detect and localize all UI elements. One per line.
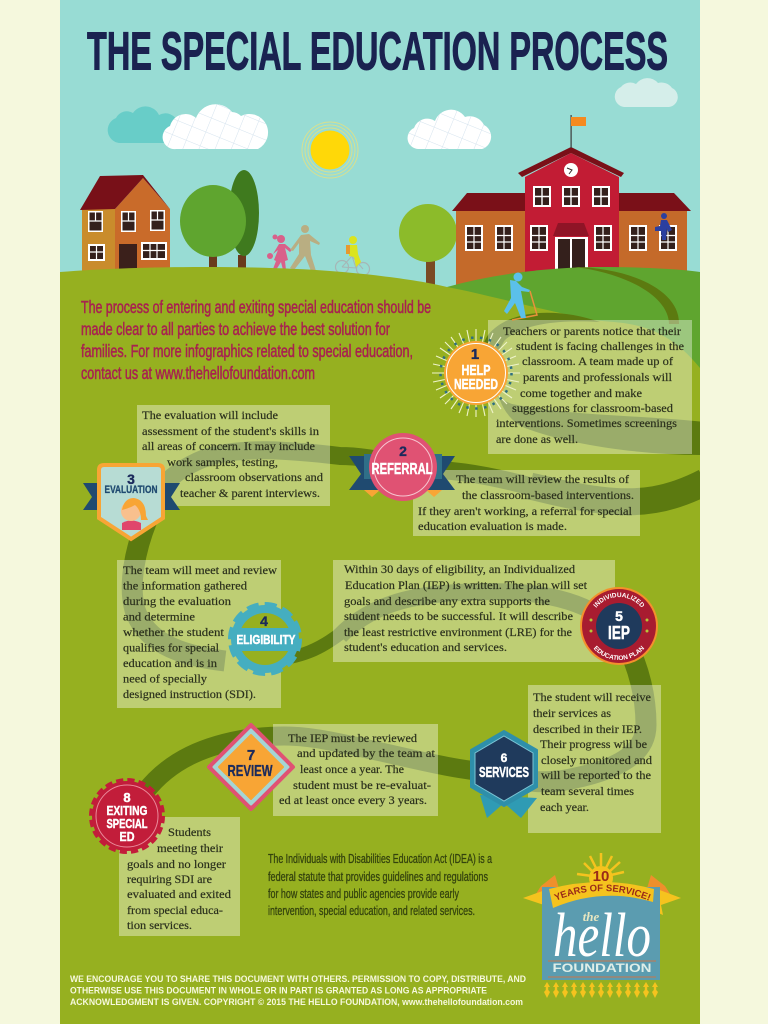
panel: step 8 text: Students — [168, 827, 212, 839]
hill: olive ground — [60, 267, 700, 1024]
panel: step 6 text: closely monitored and — [541, 755, 652, 767]
figure: adult walking — [290, 225, 320, 271]
panel: step 1 text: Teachers or parents notice that their — [503, 326, 681, 338]
panel: step 1 text — [488, 320, 692, 454]
text: intro: families. For more infographics related to special education, — [81, 341, 413, 361]
panel: step 2 text: the classroom-based interventions. — [462, 490, 634, 502]
figure: girl walking — [267, 234, 292, 270]
badge 1: help needed: NEEDED — [454, 376, 498, 393]
panel: step 4 text — [117, 560, 281, 708]
panel: step 8 text: meeting their — [157, 843, 223, 855]
logo: the hello foundation: the — [583, 909, 600, 924]
text: footer notice: ACKNOWLEDGMENT IS GIVEN. COPYRIGHT © 2015 THE HELLO FOUNDATION, www.thehellofoundation.com — [70, 997, 523, 1007]
text: footer notice: OTHERWISE USE THIS DOCUMENT IN WHOLE OR IN PART IS GRANTED AS LONG AS APPROPRIATE — [70, 986, 487, 996]
panel: step 6 text: described in their IEP. — [533, 724, 642, 736]
badge 7: review: REVIEW — [228, 763, 273, 780]
panel: step 4 text: and determine — [123, 612, 195, 624]
badge 6: services: 6 — [501, 751, 508, 765]
badge 3: evaluation: 3 — [127, 471, 135, 487]
badge 4: eligibility — [230, 604, 300, 674]
sun — [302, 122, 358, 178]
text: intro: The process of entering and exiting special education should be — [81, 297, 431, 317]
logo: the hello foundation: FOUNDATION — [552, 963, 652, 975]
panel: step 4 text: during the evaluation — [123, 596, 231, 608]
panel: step 6 text — [528, 685, 661, 833]
text: IDEA note: federal statute that provides guidelines and regulations — [268, 870, 488, 884]
panel: step 5 text: goals and describe any extra supports the — [344, 596, 550, 608]
text: footer notice: WE ENCOURAGE YOU TO SHARE THIS DOCUMENT WITH OTHERS. PERMISSION TO COPY, DISTRIBUTE, AND — [70, 974, 526, 984]
text: IDEA note: intervention, special education, and related services. — [268, 904, 475, 918]
panel: step 6 text: will be reported to the — [541, 770, 651, 782]
panel: step 1 text: suggestions for classroom-based — [512, 403, 673, 415]
badge 5: IEP: 5 — [615, 608, 623, 624]
figure: child on scooter — [504, 272, 537, 320]
badge 2: referral: REFERRAL — [372, 461, 433, 478]
badge 5: IEP: IEP — [608, 623, 630, 643]
panel: step 4 text: need of specially — [123, 674, 207, 686]
panel: step 2 text — [413, 470, 640, 536]
panel: step 3 text: teacher & parent interviews. — [180, 488, 320, 500]
panel: step 7 text: The IEP must be reviewed — [288, 733, 417, 745]
logo: the hello foundation: hello — [553, 902, 651, 970]
text: IDEA note: The Individuals with Disabilities Education Act (IDEA) is a — [268, 852, 492, 866]
panel: step 5 text: Within 30 days of eligibility, an Individualized — [344, 564, 575, 576]
cloud: teal — [108, 106, 181, 143]
panel: step 8 text — [119, 817, 240, 936]
panel: step 8 text: evaluated and exited — [127, 889, 231, 901]
panel: step 8 text: tion services. — [127, 920, 192, 932]
badge 6: services — [471, 731, 537, 818]
badge 8: exiting special ed — [92, 781, 162, 851]
panel: step 3 text: The evaluation will include — [142, 410, 278, 422]
icon: girl face — [121, 498, 148, 530]
badge 2: referral — [349, 433, 455, 501]
panel: step 3 text: assessment of the student's skills in — [142, 426, 319, 438]
panel: step 7 text — [273, 724, 438, 816]
panel: step 8 text: goals and no longer — [127, 859, 226, 871]
badge 3: evaluation — [83, 465, 180, 539]
panel: step 6 text: their services as — [533, 708, 612, 720]
badge 1: help needed — [432, 329, 520, 417]
panel: step 6 text: The student will receive — [533, 692, 651, 704]
panel: step 3 text — [137, 405, 330, 506]
badge 1: help needed: HELP — [462, 362, 490, 379]
school building — [452, 115, 691, 285]
panel: step 1 text: come together and make — [520, 388, 642, 400]
panel: step 4 text: whether the student — [123, 627, 225, 639]
logo: the hello foundation: YEARS OF SERVICE! — [554, 884, 651, 900]
badge 7: review: 7 — [247, 747, 255, 764]
logo: the hello foundation: 10 — [593, 868, 609, 885]
badge 8: exiting special ed: 8 — [123, 790, 131, 805]
panel: step 5 text: student needs to be successful. It will describe — [344, 611, 573, 623]
cloud: pale top right — [615, 78, 678, 107]
school clock — [564, 163, 578, 177]
panel: step 1 text: are done as well. — [496, 434, 578, 446]
text: intro: contact us at www.thehellofoundation.com — [81, 363, 315, 383]
panel: step 3 text: work samples, testing, — [167, 457, 278, 469]
text: IDEA note — [268, 852, 492, 918]
panel: step 7 text: least once a year. The — [300, 764, 404, 776]
panel: step 4 text: the information gathered — [123, 580, 247, 592]
badge 1: help needed: 1 — [471, 346, 479, 363]
badge 4: eligibility: 4 — [260, 613, 268, 629]
panel: step 4 text: education and is in — [123, 658, 217, 670]
badge 3: evaluation: EVALUATION — [104, 484, 158, 496]
panel: step 6 text: each year. — [540, 802, 589, 814]
hill: green right — [447, 267, 700, 380]
panel: step 5 text — [333, 560, 615, 662]
panel: step 7 text: ed at least once every 3 years. — [279, 795, 427, 807]
house — [80, 175, 170, 274]
school flag — [570, 115, 586, 148]
panel: step 2 text: education evaluation is made. — [418, 521, 567, 533]
panel: step 4 text: designed instruction (SDI). — [123, 689, 256, 701]
text: footer notice — [70, 974, 526, 1007]
panel: step 1 text: interventions. Sometimes screenings — [496, 418, 678, 430]
panel: step 4 text: qualifies for special — [123, 642, 219, 654]
panel: step 6 text: team several times — [541, 786, 635, 798]
text: intro — [81, 297, 431, 383]
panel: step 2 text: If they aren't working, a referral for special — [418, 506, 632, 518]
panel: step 3 text: classroom observations and — [185, 472, 323, 484]
badge 8: exiting special ed: SPECIAL — [106, 816, 148, 831]
badge 5: IEP: EDUCATION PLAN — [594, 646, 644, 660]
panel: step 4 text: The team will meet and review — [123, 565, 278, 577]
panel: step 3 text: all areas of concern. It may include — [142, 441, 315, 453]
panel: step 5 text: the least restrictive environment (LRE) for the — [344, 627, 572, 639]
badge 4: eligibility: ELIGIBILITY — [236, 632, 296, 647]
winding road — [132, 267, 705, 792]
figure: cyclist — [336, 236, 370, 276]
panel: step 2 text: The team will review the results of — [456, 474, 629, 486]
tree: dark — [229, 170, 259, 275]
panel: step 5 text: Education Plan (IEP) is written. The plan will set — [345, 580, 588, 592]
panel: step 1 text: parents and professionals will — [523, 372, 672, 384]
panel: step 7 text: student must be re-evaluat- — [293, 780, 431, 792]
badge 8: exiting special ed: ED — [120, 829, 134, 844]
figure: person on school wing — [655, 213, 672, 240]
badge 6: services: SERVICES — [479, 764, 529, 781]
badge 7: review — [209, 725, 293, 809]
badge 8: exiting special ed: EXITING — [106, 803, 148, 818]
panel: step 1 text: student is facing challenges in the — [516, 341, 684, 353]
panel: step 6 text: Their progress will be — [540, 739, 647, 751]
panel: step 7 text: and updated by the team at — [297, 748, 436, 760]
panel: step 8 text: requiring SDI are — [127, 874, 212, 886]
badge 5: IEP: INDIVIDUALIZED — [593, 592, 644, 608]
tree: right — [399, 204, 457, 286]
text: IDEA note: for how states and public agencies provide early — [268, 887, 460, 901]
badge 2: referral: 2 — [399, 443, 407, 459]
panel: step 1 text: classroom. A team made up of — [522, 356, 673, 368]
panel: step 8 text: from special educa- — [127, 905, 223, 917]
logo: the hello foundation — [523, 853, 681, 998]
cloud: white left — [163, 104, 268, 149]
tree: round green — [180, 185, 246, 275]
cloud: white right — [408, 110, 491, 149]
badge 5: IEP — [580, 587, 658, 665]
text: intro: made clear to all parties to achieve the best solution for — [81, 319, 390, 339]
panel: step 5 text: student's education and services. — [344, 642, 507, 654]
logo: sun rays — [577, 853, 624, 890]
